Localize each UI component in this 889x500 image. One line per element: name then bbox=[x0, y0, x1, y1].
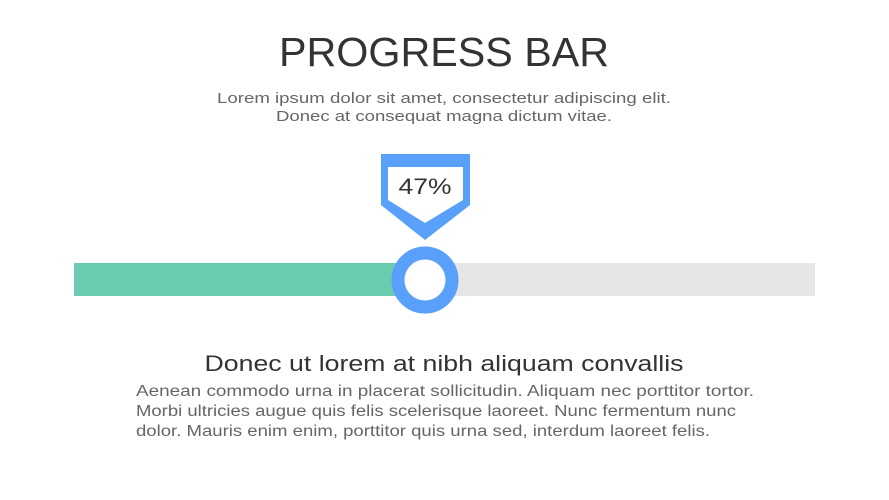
progress knob bbox=[398, 253, 452, 307]
subtitle: Donec at consequat magna dictum vitae. bbox=[276, 108, 612, 125]
section heading: Donec ut lorem at nibh aliquam convallis bbox=[204, 351, 684, 376]
subtitle bbox=[217, 90, 671, 125]
subtitle: Lorem ipsum dolor sit amet, consectetur adipiscing elit. bbox=[217, 90, 671, 107]
body text: Aenean commodo urna in placerat sollicitudin. Aliquam nec porttitor tortor. bbox=[136, 383, 754, 400]
progress bar bbox=[74, 253, 815, 307]
body text: Morbi ultricies augue quis felis scelerisque laoreet. Nunc fermentum nunc bbox=[136, 403, 736, 420]
body text: dolor. Mauris enim enim, porttitor quis urna sed, interdum laoreet felis. bbox=[136, 423, 710, 440]
percentage marker bbox=[381, 154, 470, 240]
title: PROGRESS BAR bbox=[279, 29, 609, 75]
percentage marker: 47% bbox=[398, 174, 452, 199]
body text bbox=[136, 383, 754, 440]
